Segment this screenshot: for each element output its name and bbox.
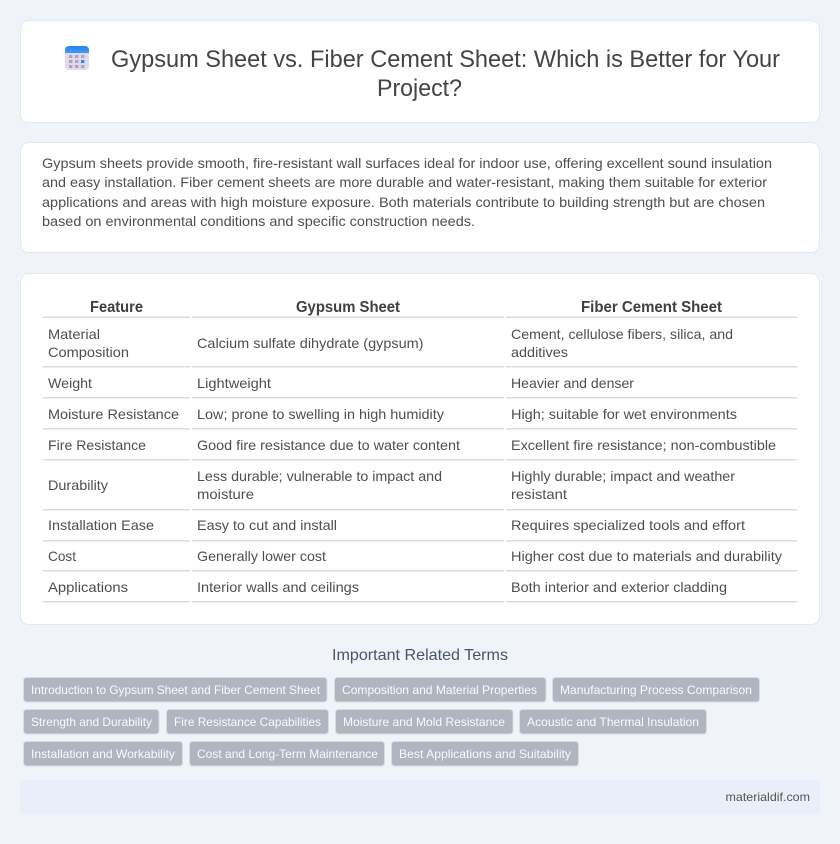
tag: Strength and Durability <box>31 715 152 729</box>
table row: material composition: Calcium sulfate dihydrate (gypsum) <box>197 335 424 351</box>
table row: durability: Durability <box>48 477 108 493</box>
tag: Moisture and Mold Resistance <box>343 715 505 729</box>
table row: installation ease: Installation Ease <box>48 517 154 533</box>
table row: moisture resistance: Moisture Resistance <box>48 406 179 422</box>
table row: material composition: Cement, cellulose fibers, silica, and <box>511 326 733 342</box>
table row: durability: moisture <box>197 486 254 502</box>
table row: cost: Generally lower cost <box>197 548 326 564</box>
table row: material composition: Composition <box>48 344 129 360</box>
panel: title header <box>20 20 820 122</box>
table row: cost: Cost <box>48 548 76 564</box>
table row: moisture resistance <box>43 406 797 430</box>
tag: Acoustic and Thermal Insulation <box>527 715 699 729</box>
table row: weight: Lightweight <box>197 375 271 391</box>
panel: comparison table <box>20 274 820 624</box>
table row: moisture resistance: Low; prone to swelling in high humidity <box>197 406 444 422</box>
table row: fire resistance: Good fire resistance due to water content <box>197 437 460 453</box>
text block: summary paragraph <box>42 155 772 229</box>
table row: installation ease: Requires specialized tools and effort <box>511 517 745 533</box>
tag: Best Applications and Suitability <box>399 747 571 761</box>
tag: Fire Resistance Capabilities <box>174 715 321 729</box>
table row: material composition: additives <box>511 344 568 360</box>
text block: summary paragraph: based on environmental conditions and specific construction needs. <box>42 213 475 229</box>
tag: Manufacturing Process Comparison <box>560 683 752 697</box>
tag <box>392 742 578 766</box>
table row: durability: resistant <box>511 486 567 502</box>
table row: moisture resistance: High; suitable for wet environments <box>511 406 737 422</box>
tag: Composition and Material Properties <box>342 683 537 697</box>
panel: introduction text <box>20 142 820 252</box>
tag <box>336 710 513 734</box>
table row: weight: Heavier and denser <box>511 375 634 391</box>
tag <box>166 710 328 734</box>
title: Gypsum Sheet vs. Fiber Cement Sheet: Which is Better for Your <box>111 46 780 73</box>
text block: summary paragraph: Gypsum sheets provide smooth, fire-resistant wall surfaces ideal for indoor use, offering excellent sound insulation <box>42 155 772 171</box>
table row: cost <box>43 548 797 572</box>
table row: durability <box>43 468 797 510</box>
text block: summary paragraph: applications and areas with high moisture exposure. Both materials contribute to building strength but are chosen <box>42 194 765 210</box>
table row: applications <box>43 579 797 602</box>
table header row <box>43 299 797 318</box>
footer <box>20 780 820 814</box>
tag <box>24 710 159 734</box>
table row: applications: Interior walls and ceilings <box>197 579 359 595</box>
table row: weight: Weight <box>48 375 92 391</box>
table row: fire resistance <box>43 437 797 460</box>
tag <box>520 710 706 734</box>
tag <box>334 678 546 702</box>
table header row: Gypsum Sheet <box>296 299 401 316</box>
title <box>111 46 780 102</box>
table row: durability: Highly durable; impact and weather <box>511 468 735 484</box>
table row: applications: Applications <box>48 579 128 595</box>
tag <box>190 742 384 766</box>
table header row: Feature <box>90 299 143 316</box>
tag: Cost and Long-Term Maintenance <box>197 747 378 761</box>
table row: material composition: Material <box>48 326 100 342</box>
table row: material composition <box>43 326 797 368</box>
footer: materialdif.com <box>726 790 810 804</box>
table row: durability: Less durable; vulnerable to impact and <box>197 468 442 484</box>
tag <box>24 678 327 702</box>
table row: weight <box>43 375 797 398</box>
tag: Installation and Workability <box>31 747 175 761</box>
icon: calendar <box>65 46 89 70</box>
table row: installation ease <box>43 517 797 542</box>
table row: fire resistance: Excellent fire resistance; non-combustible <box>511 437 776 453</box>
table row: applications: Both interior and exterior cladding <box>511 579 727 595</box>
title: Project? <box>377 75 462 102</box>
table row: cost: Higher cost due to materials and durability <box>511 548 782 564</box>
related term tags <box>24 678 760 766</box>
heading: important related terms: Important Related Terms <box>332 647 508 664</box>
table header row: Fiber Cement Sheet <box>581 299 723 316</box>
tag <box>552 678 760 702</box>
tag <box>24 742 182 766</box>
tag: Introduction to Gypsum Sheet and Fiber Cement Sheet <box>31 683 321 697</box>
table row: fire resistance: Fire Resistance <box>48 437 146 453</box>
table row: installation ease: Easy to cut and install <box>197 517 337 533</box>
text block: summary paragraph: and easy installation. Fiber cement sheets are more durable and water-resistant, making them suitable for exterior <box>42 174 767 190</box>
